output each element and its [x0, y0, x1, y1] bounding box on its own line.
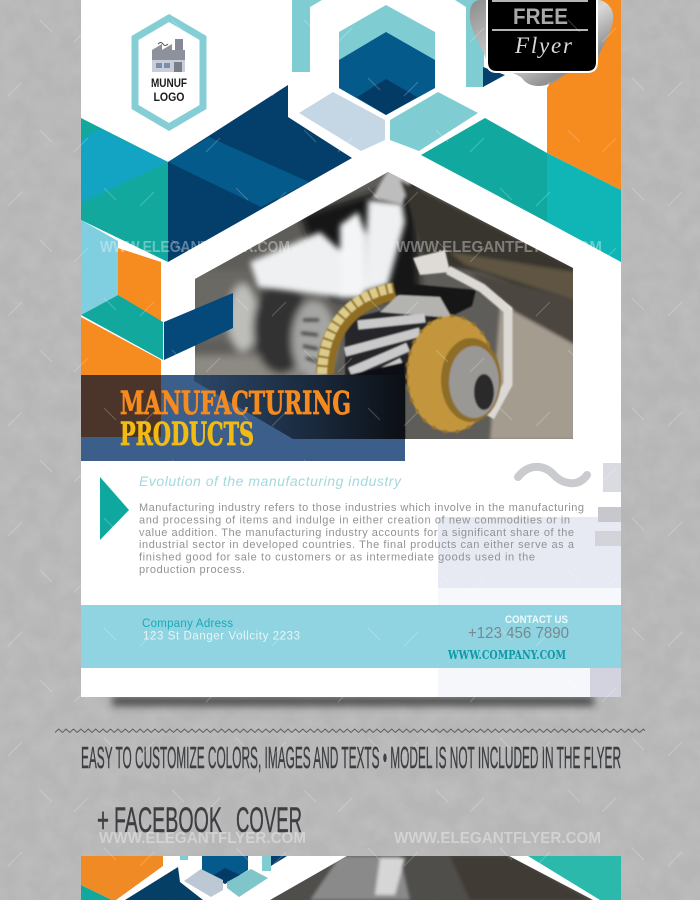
flyer drop shadow: [112, 696, 594, 706]
contact details: WWW.COMPANY.COM: [447, 648, 566, 662]
watermark text: WWW.ELEGANTFLYER.COM: [396, 239, 602, 256]
contact details: CONTACT US: [505, 614, 568, 626]
free flyer badge: Flyer: [514, 33, 573, 58]
body text: [139, 502, 584, 576]
free flyer badge: [470, 0, 613, 86]
facebook cover preview: [81, 856, 621, 900]
icon: factory: [152, 39, 185, 72]
body text: finished good for sale to customers or as intermediate goods used in the: [139, 552, 535, 564]
panel: flyer: [81, 0, 621, 697]
arrow triangle: [100, 477, 129, 540]
company address: [142, 618, 300, 642]
dark blue parallelogram: [164, 293, 233, 360]
body text: and processing of items and indulge in either creation of new commodities or in: [139, 514, 570, 526]
facebook cover heading: COVER: [236, 801, 302, 840]
body text: value addition. The manufacturing industry accounts for a significant share of the: [139, 527, 574, 539]
zigzag divider: [55, 728, 645, 734]
section heading: Evolution of the manufacturing industry: [139, 473, 402, 489]
faded factory watermark: [438, 463, 621, 697]
contact details: [447, 614, 569, 662]
left lower shapes: [81, 220, 163, 375]
light teal hexagon piece: [390, 92, 478, 151]
photo: machinery gears: [190, 170, 580, 442]
center layered hexagon: [339, 5, 435, 115]
body text: production process.: [139, 564, 245, 576]
title panel: [81, 375, 405, 461]
watermark text: WWW.ELEGANTFLYER.COM: [100, 239, 290, 256]
right teal band: [421, 118, 621, 262]
logo badge: [135, 18, 203, 127]
dark blue hexagon block: [168, 85, 352, 262]
company address: 123 St Danger Vollcity 2233: [143, 630, 300, 642]
footer band: [81, 605, 621, 668]
logo text: MUNUF: [151, 78, 187, 90]
left teal and blue block: [81, 118, 168, 262]
facebook cover heading: +: [97, 801, 109, 840]
watermark text: [99, 239, 602, 847]
logo badge: LOGO: [154, 92, 185, 104]
title text: MANUFACTURING: [120, 384, 351, 422]
title panel: PRODUCTS: [120, 415, 254, 453]
watermark text: WWW.ELEGANTFLYER.COM: [394, 830, 601, 847]
badge text: FREE: [513, 4, 568, 29]
right orange block: [547, 0, 621, 190]
body text: Manufacturing industry refers to those industries which involve in the manufacturing: [139, 502, 584, 514]
watermark text: WWW.ELEGANTFLYER.COM: [99, 830, 306, 847]
company address: Company Adress: [142, 618, 233, 630]
pale blue hexagon piece: [299, 92, 385, 151]
body text: industrial sector in developed countries. The final products can either serve as a: [139, 539, 575, 551]
facebook cover heading: FACEBOOK: [114, 801, 222, 840]
top hexagon outline: [292, 0, 505, 87]
contact details: +123 456 7890: [468, 625, 569, 642]
